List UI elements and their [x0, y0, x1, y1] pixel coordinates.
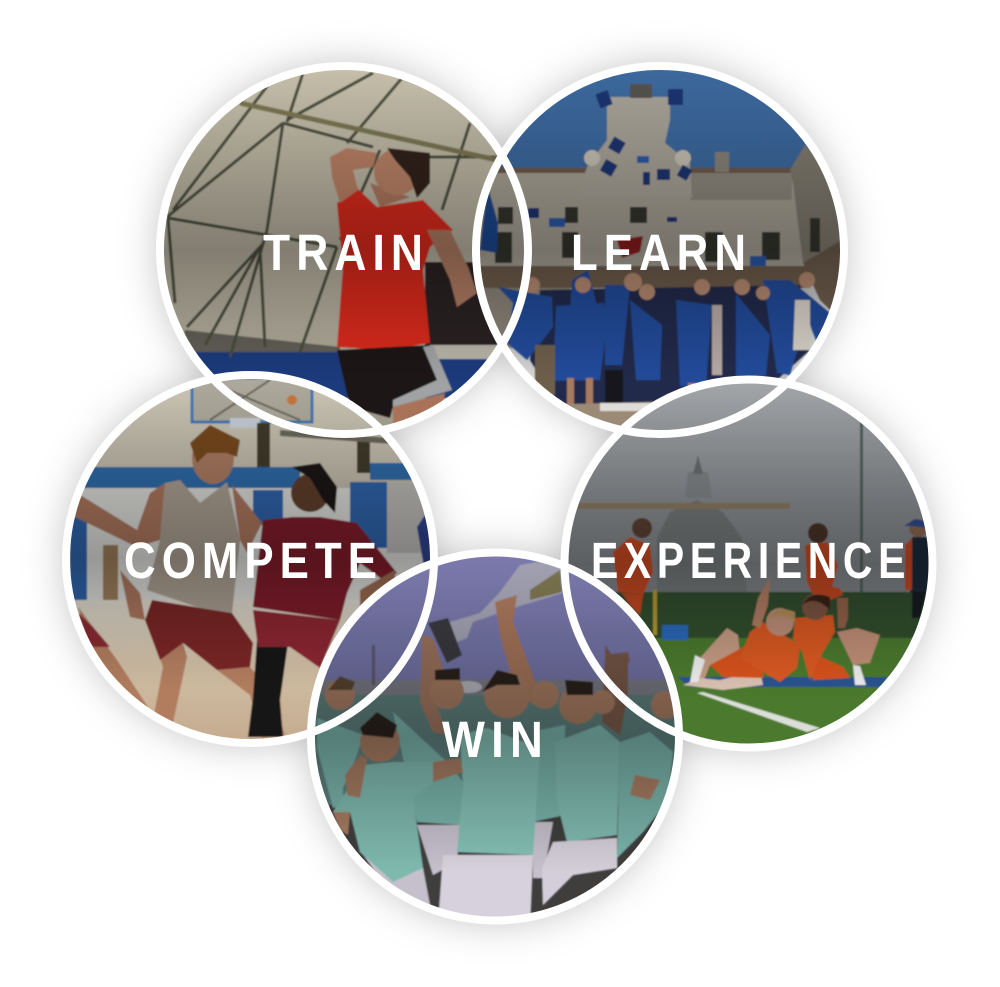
player: red shirt: [337, 188, 453, 350]
thrown graduation caps: [528, 89, 766, 266]
label: compete: COMPETE: [124, 532, 383, 589]
faces: [325, 672, 679, 762]
panel: train photo: [164, 70, 498, 426]
right front player: [555, 725, 620, 842]
panel: experience photo: [568, 384, 928, 744]
label: learn: LEARN: [571, 224, 752, 281]
player: left in tan tank: [75, 483, 165, 547]
player: black shorts: [337, 345, 450, 418]
graduates crowd: [530, 285, 810, 415]
label: train: TRAIN: [263, 224, 429, 281]
panel: compete photo: [70, 379, 430, 739]
panel: win photo: [315, 556, 675, 916]
basketball hoop: [192, 378, 312, 422]
panel: learn photo: [480, 70, 840, 426]
drop shadow behind the circles: [64, 64, 934, 922]
front left player: [333, 762, 433, 882]
label: win: WIN: [442, 711, 549, 768]
centre player shirt and shorts: [457, 728, 540, 855]
label: experience: EXPERIENCE: [591, 532, 911, 589]
trophy: [450, 558, 563, 642]
seated player left: [698, 627, 740, 680]
player: foreground arm: [78, 607, 148, 713]
teammates' shirts: [317, 712, 673, 858]
seated player right: [837, 628, 880, 665]
st peter's dome: [657, 455, 747, 595]
standing players: [613, 537, 653, 595]
player: right in maroon: [248, 640, 288, 737]
white circle outlines: [66, 66, 932, 920]
raised arms: [495, 595, 540, 705]
